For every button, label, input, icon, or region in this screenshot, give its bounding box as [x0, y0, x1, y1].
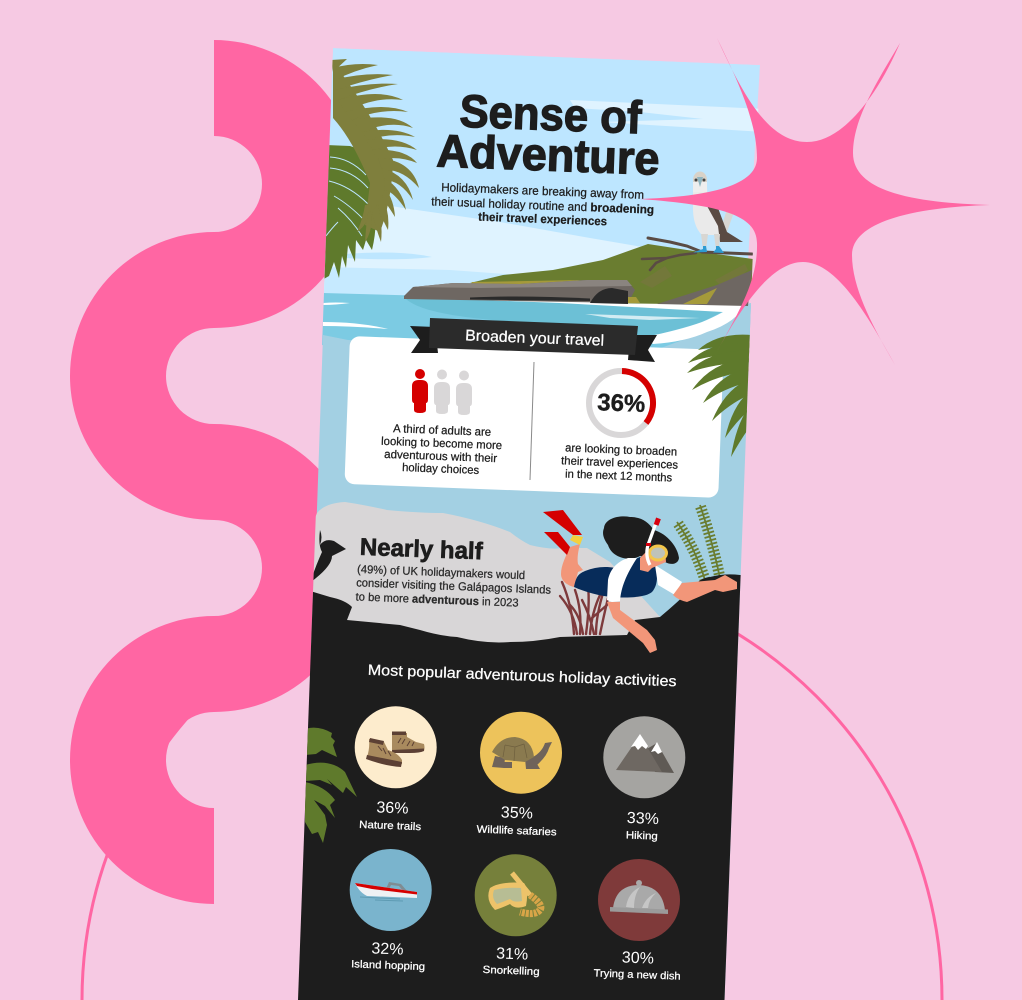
activity: wildlife safaries — [476, 712, 562, 838]
icon: dark palm frond — [322, 145, 376, 280]
activity: trying a new dish: Trying a new dish — [593, 967, 681, 983]
subtitle: their usual holiday routine and broadening — [431, 194, 654, 217]
title: Sense of — [459, 85, 643, 143]
card text: a third of adults: A third of adults are — [393, 423, 491, 439]
clouds — [320, 100, 765, 296]
icon: mountains — [616, 734, 674, 773]
dark lower section — [290, 574, 770, 1000]
activity: wildlife safaries: 35% — [501, 804, 533, 823]
activity: hiking: 33% — [627, 810, 659, 828]
activity: trying a new dish: 30% — [622, 949, 654, 968]
island — [404, 244, 760, 306]
icon: three people — [412, 369, 472, 415]
heading: Nearly half: Nearly half — [359, 534, 484, 565]
pink squiggle shape — [70, 40, 358, 904]
poster — [290, 48, 770, 1000]
activity: nature trails: 36% — [376, 799, 409, 818]
donut chart: 36%: 36% — [597, 389, 646, 418]
activity: hiking — [603, 716, 685, 843]
subtitle: their travel experiences — [478, 210, 608, 228]
white stats card — [344, 336, 724, 498]
seaweed — [677, 505, 720, 580]
title — [436, 94, 658, 176]
activity: island hopping: 32% — [371, 940, 404, 959]
icon: bird silhouette — [313, 530, 346, 580]
pink star — [640, 38, 990, 365]
coral — [560, 582, 608, 634]
icon: right palm frond — [687, 334, 750, 457]
activity: wildlife safaries: Wildlife safaries — [476, 824, 557, 838]
grey person — [434, 370, 450, 414]
torso — [574, 557, 657, 597]
activity: snorkelling — [475, 854, 557, 978]
body text: Galapagos: (49%) of UK holidaymakers would — [357, 564, 525, 582]
ribbon bar — [429, 318, 638, 355]
sky — [320, 48, 760, 310]
card text: broaden experiences: their travel experiences — [561, 455, 679, 472]
subtitle — [431, 182, 654, 226]
subtitle: Holidaymakers are breaking away from — [441, 180, 644, 202]
icon: tortoise — [492, 737, 552, 769]
sleeves — [607, 558, 682, 602]
hair — [603, 516, 679, 564]
activity: snorkelling: 31% — [496, 945, 528, 964]
card text: a third of adults: looking to become more — [381, 436, 502, 452]
divider — [530, 362, 534, 480]
card text: a third of adults: adventurous with their — [384, 449, 497, 465]
mask — [648, 544, 668, 562]
snorkeller — [543, 510, 737, 653]
activity: island hopping: Island hopping — [351, 958, 425, 973]
banner: Broaden your travel — [344, 318, 724, 498]
icon: olive palm frond — [331, 59, 419, 242]
white shoreline swoosh — [400, 297, 745, 344]
thin pink circle outline — [82, 570, 942, 1000]
icon: speedboat — [355, 882, 417, 901]
leg — [561, 544, 583, 587]
activity: trying a new dish — [593, 859, 681, 983]
card text: a third of adults: holiday choices — [402, 462, 480, 477]
grey person — [456, 370, 472, 415]
card text: broaden experiences: are looking to broaden — [565, 442, 677, 459]
activity: island hopping — [350, 849, 432, 973]
icon: blue-footed booby — [693, 172, 743, 253]
card text: broaden experiences — [561, 442, 679, 485]
activity: nature trails: Nature trails — [359, 819, 421, 833]
fins — [543, 510, 583, 555]
icon: bottom-left palm — [305, 728, 357, 843]
title: Adventure — [436, 124, 660, 185]
card text: broaden experiences: in the next 12 months — [565, 468, 673, 485]
ribbon tails — [410, 326, 657, 362]
neck and face — [640, 548, 666, 572]
snorkel — [646, 517, 661, 565]
red person — [412, 369, 428, 413]
branch — [642, 238, 752, 270]
ribbon label: Broaden your travel — [465, 327, 604, 350]
card text: a third of adults — [381, 423, 502, 477]
donut chart: 36% — [589, 371, 653, 435]
icon: cloche — [610, 880, 668, 914]
activity: snorkelling: Snorkelling — [482, 964, 540, 978]
body text: Galapagos — [355, 564, 552, 610]
icon: boots — [366, 732, 424, 767]
grey rock panel — [310, 502, 660, 660]
arms — [673, 575, 737, 602]
activity: hiking: Hiking — [626, 829, 658, 843]
lower water panel — [300, 303, 760, 1000]
activity: nature trails — [355, 706, 437, 833]
body text: Galapagos: to be more adventurous in 2023 — [355, 591, 519, 610]
heading: most popular: Most popular adventurous holiday activities — [367, 662, 677, 690]
sea — [322, 293, 751, 348]
icon: mask and snorkel — [488, 873, 541, 914]
body text: Galapagos: consider visiting the Galápagos Islands — [356, 577, 552, 597]
